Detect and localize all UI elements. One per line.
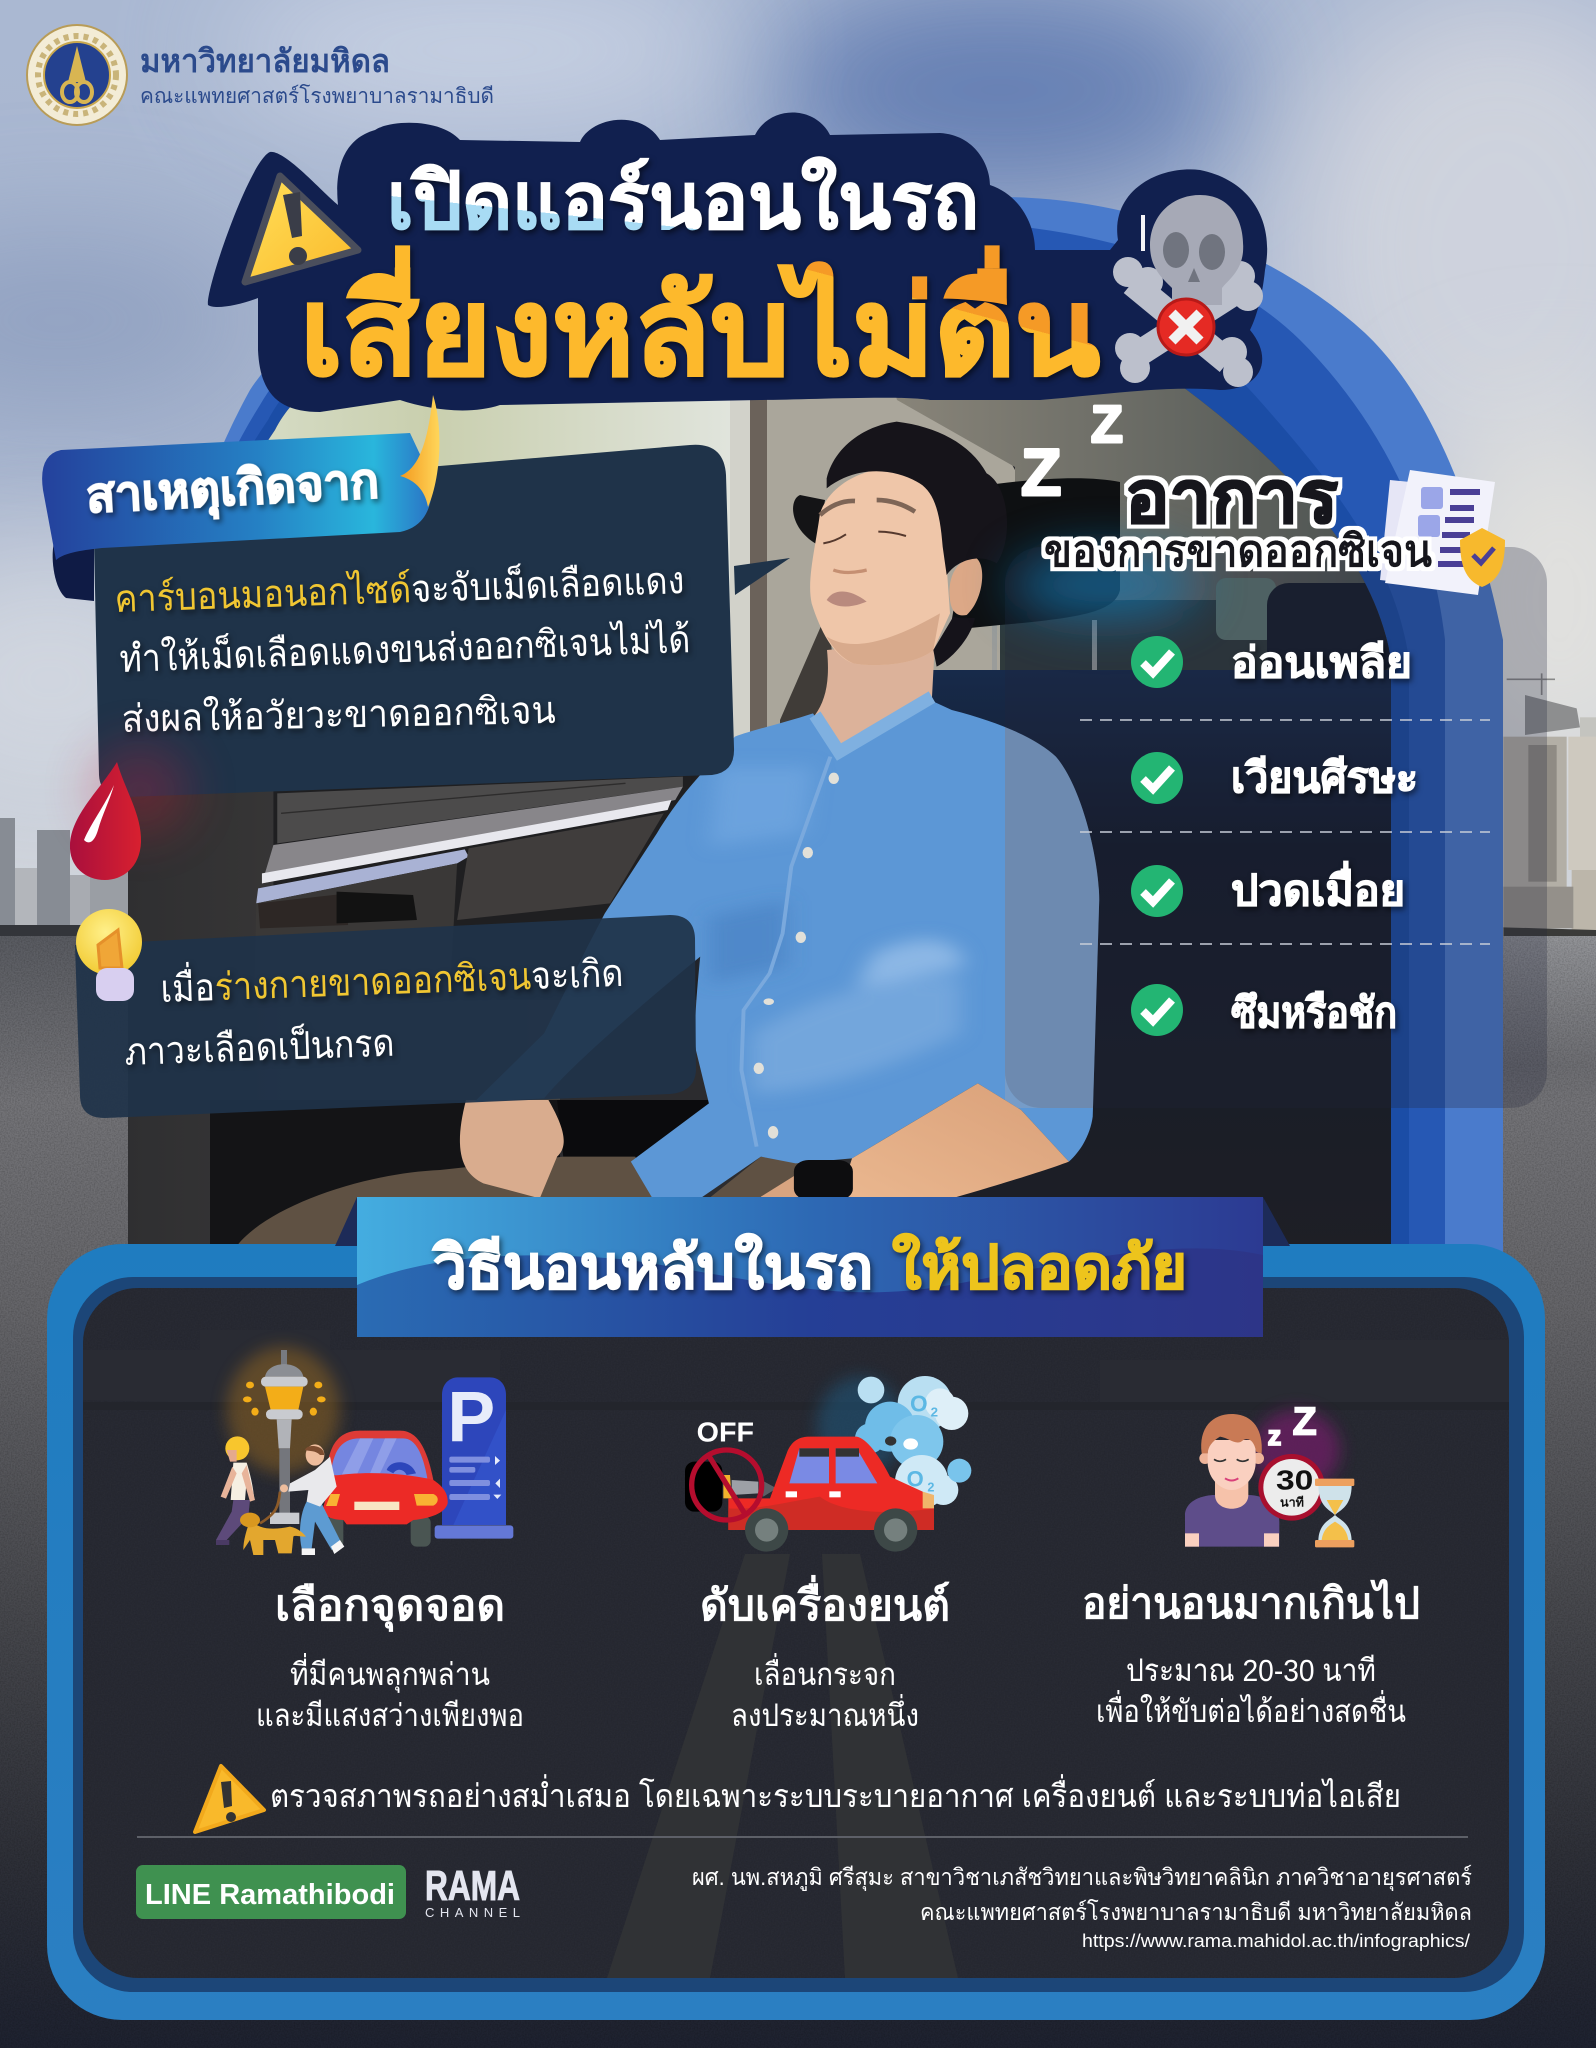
panel background: faint road and skyline [83, 1288, 1509, 1978]
oxygen clouds: 2 [931, 1405, 938, 1420]
logo [27, 25, 127, 125]
headrest posts [992, 620, 1097, 670]
column 3 text [1082, 1578, 1420, 1729]
panel text: carbon monoxide: ทำให้เม็ดเลือดแดงขนส่งออกซิเจนไม่ได้ [119, 616, 691, 681]
nose [833, 570, 867, 572]
symptom list [1080, 636, 1490, 1036]
banner: safe sleeping heading: วิธีนอนหลับในรถ [432, 1233, 873, 1301]
title: line 2: เสี่ยงหลับไม่ตื่น [300, 246, 1100, 400]
background: city skyline right [1503, 673, 1596, 942]
column 3 text: เพื่อให้ขับต่อได้อย่างสดชื่น [1096, 1690, 1406, 1729]
panel: acidosis note [75, 915, 696, 1118]
wrist watch [794, 1160, 853, 1200]
symptom: dizziness: เวียนศีรษะ [1231, 754, 1418, 801]
sleep zz: Z [1021, 435, 1061, 509]
vehicle check advice: ตรวจสภาพรถอย่างสม่ำเสมอ โดยเฉพาะระบบระบายอากาศ เครื่องยนต์ และระบบท่อไอเสีย [270, 1774, 1401, 1814]
symptom: fatigue: อ่อนเพลีย [1231, 639, 1412, 686]
shirt buttons [754, 773, 839, 1139]
background: asphalt road [0, 925, 1596, 2048]
interior wall behind head [767, 398, 1015, 727]
banner flaps [335, 1197, 1290, 1246]
black gap beside torso [557, 1100, 718, 1167]
column 3 text: อย่านอนมากเกินไป [1082, 1578, 1420, 1628]
car window [268, 400, 730, 610]
skull highlight [1141, 215, 1145, 251]
shirt folds [709, 767, 965, 1093]
man: head [810, 422, 1007, 667]
banner: safe sleeping heading [357, 1197, 1263, 1337]
logo text: คณะแพทยศาสตร์โรงพยาบาลรามาธิบดี [140, 84, 494, 108]
panel text: acidosis: เมื่อร่างกายขาดออกซิเจนจะเกิด [160, 947, 624, 1011]
skull [1150, 195, 1243, 305]
shirt placket [741, 757, 830, 1147]
credits: https://www.rama.mahidol.ac.th/infographics/ [1082, 1931, 1470, 1951]
symptoms heading [1044, 458, 1432, 576]
icon: blood drop [70, 745, 190, 880]
icon: warning triangle [245, 176, 358, 282]
off label: OFF [697, 1417, 754, 1448]
dog [240, 1513, 306, 1555]
walking person [216, 1436, 255, 1545]
glow behind symptoms heading [1010, 550, 1200, 620]
woman [1185, 1414, 1279, 1547]
panel text: acidosis: ภาวะเลือดเป็นกรด [124, 1020, 395, 1074]
photo: sleeping man in car [128, 260, 1400, 1260]
red cross badge [1158, 299, 1214, 355]
glow [817, 1377, 903, 1477]
trousers [236, 1157, 800, 1250]
panel: safe sleeping frame [47, 1244, 1545, 2020]
banner: safe sleeping heading: ให้ปลอดภัย [892, 1233, 1187, 1301]
column 2 text: เลื่อนกระจก [754, 1653, 896, 1692]
brows [820, 500, 915, 515]
column 1 text: เลือกจุดจอด [275, 1582, 505, 1633]
column 1 text: และมีแสงสว่างเพียงพอ [256, 1698, 524, 1733]
oxygen clouds: O [910, 1391, 928, 1417]
symptoms heading: ของการขาดออกซิเจน [1044, 527, 1432, 576]
column 1 text [256, 1582, 524, 1733]
icon: skull and crossbones [1113, 195, 1263, 387]
ribbon: causes heading: สาเหตุเกิดจาก [85, 455, 380, 526]
panel: symptoms background [1005, 547, 1547, 1108]
rama channel logo [425, 1862, 520, 1920]
symptom: drowsy or seizures [1131, 984, 1397, 1036]
forearm [839, 1083, 1069, 1198]
credits: ผศ. นพ.สหภูมิ ศรีสุมะ สาขาวิชาเภสัชวิทยาและพิษวิทยาคลินิก ภาควิชาอายุรศาสตร์ [692, 1864, 1472, 1891]
car engine key [685, 1462, 777, 1512]
zz letters: Z [1293, 1399, 1317, 1443]
car ceiling [896, 388, 1365, 600]
symptom: dizziness [1131, 752, 1418, 804]
column 1 text: ที่มีคนพลุกพล่าน [290, 1653, 490, 1694]
zz letters: z [1268, 1420, 1281, 1451]
illustration: parking scene [216, 1347, 513, 1555]
mouth [827, 591, 867, 606]
headrest behind man [950, 478, 1120, 630]
panel: cause explanation [93, 445, 790, 797]
rama channel logo: CHANNEL [425, 1905, 520, 1920]
sleep zz [1021, 396, 1123, 509]
jaw shading [827, 613, 940, 665]
symptom: aches: ปวดเมื่อย [1231, 861, 1405, 914]
face [810, 468, 950, 665]
under ear hair [933, 617, 975, 667]
sleep zz: Z [1091, 396, 1123, 454]
door trim [254, 760, 725, 1000]
oxygen clouds [855, 1376, 971, 1508]
line contact badge: LINE Ramathibodi [145, 1879, 395, 1911]
rear cabin [1000, 600, 1390, 670]
man: collar [815, 697, 932, 752]
logo text: มหาวิทยาลัยมหิดล [140, 43, 390, 79]
column 2 text: ดับเครื่องยนต์ [700, 1575, 950, 1630]
hair [827, 422, 1007, 575]
icon: warning small [195, 1766, 264, 1832]
ribbon: causes heading [42, 395, 439, 601]
red car side [728, 1437, 934, 1552]
icon: document with shield [1380, 470, 1505, 595]
armrest [210, 1100, 560, 1260]
rama channel logo: RAMA [425, 1862, 520, 1909]
background: cloudy sky [0, 0, 1596, 950]
hourglass [1315, 1479, 1354, 1547]
person with hoodie [260, 1444, 344, 1555]
symptoms heading: อาการ [1125, 458, 1338, 538]
dark wedge beside neck [780, 627, 832, 724]
small headrest left of face [793, 495, 825, 545]
column 3 text: ประมาณ 20-30 นาที [1126, 1653, 1376, 1688]
parking sign: P [447, 1378, 495, 1458]
parking sign [435, 1377, 513, 1539]
closed eyes [823, 532, 906, 543]
panel text: carbon monoxide: ส่งผลให้อวัยวะขาดออกซิเจน [121, 689, 556, 741]
shirt [475, 700, 1099, 1198]
ear [949, 558, 982, 615]
speed sign 30 [1258, 1454, 1325, 1521]
glow [1253, 1410, 1340, 1490]
title blob [208, 112, 1267, 412]
door pillar [730, 400, 767, 738]
seat pillar and door base [128, 620, 560, 1260]
oxygen clouds: 2 [927, 1481, 934, 1495]
credits [692, 1864, 1472, 1951]
rear headrest [1267, 583, 1394, 675]
street lamp [243, 1350, 326, 1524]
prohibition sign [692, 1450, 762, 1520]
symptom: aches [1131, 861, 1405, 917]
shirt tint under symptoms panel [1005, 700, 1120, 1108]
rear window [1216, 578, 1276, 640]
credits: คณะแพทยศาสตร์โรงพยาบาลรามาธิบดี มหาวิทยาลัยมหิดล [920, 1899, 1472, 1925]
logo text [140, 43, 494, 108]
rear seat [930, 670, 1400, 1260]
panel text: carbon monoxide: คาร์บอนมอนอกไซด์จะจับเม็ดเลือดแดง [114, 557, 685, 621]
speed sign 30: นาที [1280, 1496, 1304, 1510]
wrist [761, 1175, 856, 1200]
background: city skyline left [0, 818, 128, 926]
lamp glow [227, 1347, 340, 1473]
illustration: woman napping with 30 minute timer [1185, 1399, 1354, 1547]
symptom: fatigue [1131, 636, 1412, 688]
column 2 text: ลงประมาณหนึ่ง [731, 1694, 919, 1733]
crossbones [1113, 257, 1263, 387]
left hand [460, 1100, 564, 1198]
red car front [322, 1431, 448, 1547]
illustration: engine off car with oxygen [685, 1376, 971, 1552]
man: body group [236, 700, 1099, 1250]
line contact badge [136, 1865, 406, 1919]
speed sign 30: 30 [1276, 1464, 1313, 1495]
panel text: acidosis [124, 947, 624, 1074]
zz letters [1268, 1399, 1317, 1451]
oxygen clouds: O [907, 1467, 924, 1492]
symptom: drowsy or seizures: ซึมหรือชัก [1231, 989, 1397, 1036]
icon: light bulb [76, 909, 142, 1001]
column 2 text [700, 1575, 950, 1733]
man: neck [815, 640, 935, 752]
blue arch frame [128, 197, 1503, 1260]
panel text: carbon monoxide [114, 557, 691, 741]
title: line 1: เปิดแอร์นอนในรถ [387, 156, 979, 245]
